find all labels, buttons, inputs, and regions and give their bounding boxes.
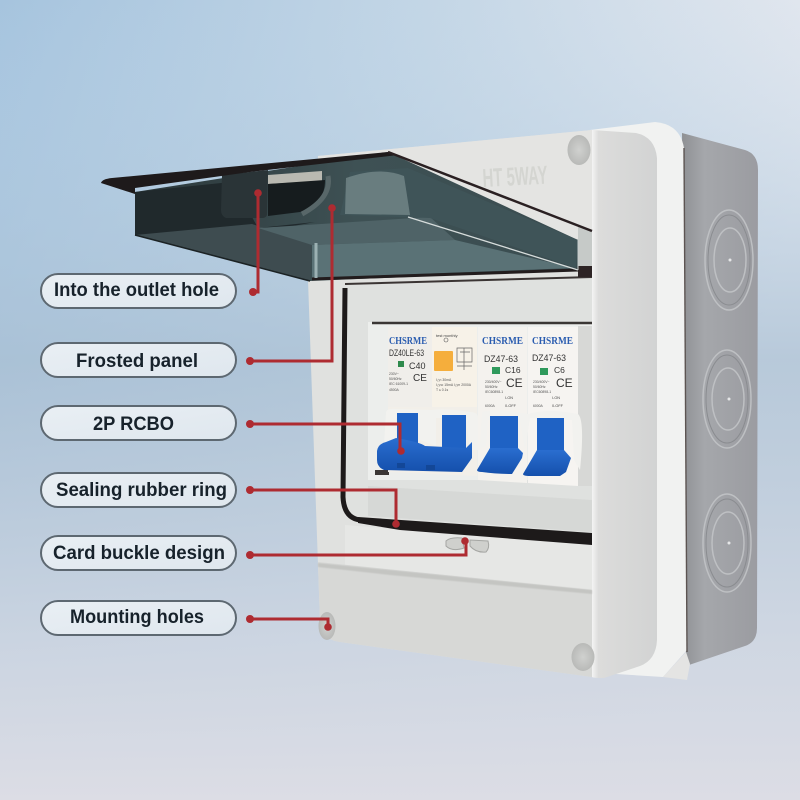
leader: Mounting holes xyxy=(246,615,332,631)
label: Frosted panel: Frosted panel xyxy=(76,351,198,372)
label: C16: 0-OFF xyxy=(505,404,517,408)
main face xyxy=(308,130,592,677)
knockout: top xyxy=(705,210,753,310)
outlet tab xyxy=(221,170,268,218)
label: C40 xyxy=(389,335,427,392)
label: Card buckle design: Card buckle design xyxy=(53,543,225,564)
screw hole: top xyxy=(568,135,590,165)
blue handle: 2P RCBO xyxy=(377,413,472,472)
label: Mounting holes: Mounting holes xyxy=(70,607,204,628)
label: C16: 6000A xyxy=(485,404,496,408)
label: C6: 0-OFF xyxy=(552,404,564,408)
label: test and schematic: test monthly xyxy=(436,333,458,338)
leader: Card buckle design xyxy=(246,537,469,559)
label: C16 xyxy=(482,335,523,408)
knockout: middle xyxy=(703,350,751,448)
white collars xyxy=(384,409,478,450)
label: C6: 230/400V~ xyxy=(533,380,550,384)
label: C6: IEC60898-1 xyxy=(533,390,551,394)
label: C16: 50/60Hz xyxy=(485,385,498,389)
label: C40: DZ40LE-63 xyxy=(389,348,424,358)
circuit breakers xyxy=(368,322,592,486)
blue handle: C6 xyxy=(523,418,571,476)
breaker body: C6 xyxy=(528,327,578,486)
leader: Sealing rubber ring xyxy=(246,486,400,528)
label: C16: IEC60898-1 xyxy=(485,390,503,394)
label: C16: C16 xyxy=(505,365,521,375)
lid body xyxy=(135,152,578,281)
label: C16: CE xyxy=(506,376,523,390)
label: C40: 50/60Hz xyxy=(389,377,402,381)
label: 2P RCBO: 2P RCBO xyxy=(93,414,174,435)
label: C6 xyxy=(532,335,573,408)
breaker body: C16 xyxy=(478,327,527,483)
label: C6: 6000A xyxy=(533,404,544,408)
lower band xyxy=(318,562,592,677)
label: 2P RCBO xyxy=(41,406,236,440)
label: test and schematic: I△no 15mA I△m 2000A xyxy=(436,383,472,387)
label: C40: CE xyxy=(413,373,427,384)
mounting hole xyxy=(318,612,336,640)
label: Into the outlet hole: Into the outlet hole xyxy=(54,280,219,301)
label: test and schematic: T ≤ 0.1s xyxy=(436,388,448,392)
transparent lid xyxy=(101,152,592,281)
label: Frosted panel xyxy=(41,343,236,377)
label: C40: 4500A xyxy=(389,388,400,392)
right flank xyxy=(592,130,657,678)
label: C40: CHSRME xyxy=(389,335,427,347)
blue handle: C16 xyxy=(477,416,523,474)
upper band xyxy=(318,130,592,280)
top flap xyxy=(101,152,398,194)
leader: Frosted panel xyxy=(246,204,336,365)
corner lug xyxy=(663,652,690,680)
label: Mounting holes xyxy=(41,601,236,635)
interior recess with rubber ring xyxy=(343,277,592,545)
outer flange xyxy=(585,122,687,677)
lid end gap xyxy=(578,225,592,277)
screw hole: bottom xyxy=(572,643,594,671)
label: test and schematic: I△n 30mA xyxy=(436,378,452,382)
label: C6: CE xyxy=(556,376,573,390)
label: C6: I-ON xyxy=(552,396,560,400)
din tray xyxy=(368,322,592,480)
label: Card buckle design xyxy=(41,536,236,570)
enclosure front body xyxy=(308,122,690,680)
breaker body: RCBO xyxy=(388,327,477,476)
label: C16: I-ON xyxy=(505,396,513,400)
label: C16: CHSRME xyxy=(482,335,523,347)
label: Into the outlet hole xyxy=(41,274,236,308)
label: C16: 230/400V~ xyxy=(485,380,502,384)
leader: Into the outlet hole xyxy=(249,189,262,296)
label: Sealing rubber ring xyxy=(41,473,236,507)
lower edges xyxy=(135,235,310,281)
leader: 2P RCBO xyxy=(246,420,405,455)
knockout: bottom xyxy=(703,494,751,592)
label: C6: CHSRME xyxy=(532,335,573,347)
label: C6: 50/60Hz xyxy=(533,385,546,389)
label: C40: 230V~ xyxy=(389,372,399,376)
label: Sealing rubber ring: Sealing rubber ring xyxy=(56,480,227,501)
side wall of enclosure with knockouts xyxy=(682,133,758,666)
label: C6: DZ47-63 xyxy=(532,353,566,363)
embossed mark: HT 5WAY xyxy=(482,160,548,193)
label: C40: IEC 61009-1 xyxy=(389,382,408,386)
face below ring xyxy=(345,525,592,590)
card buckle xyxy=(446,538,489,552)
label: C40: C40 xyxy=(409,361,426,371)
label: C16: DZ47-63 xyxy=(484,354,518,364)
label: test and schematic xyxy=(434,333,472,392)
label: C6: C6 xyxy=(554,365,565,375)
